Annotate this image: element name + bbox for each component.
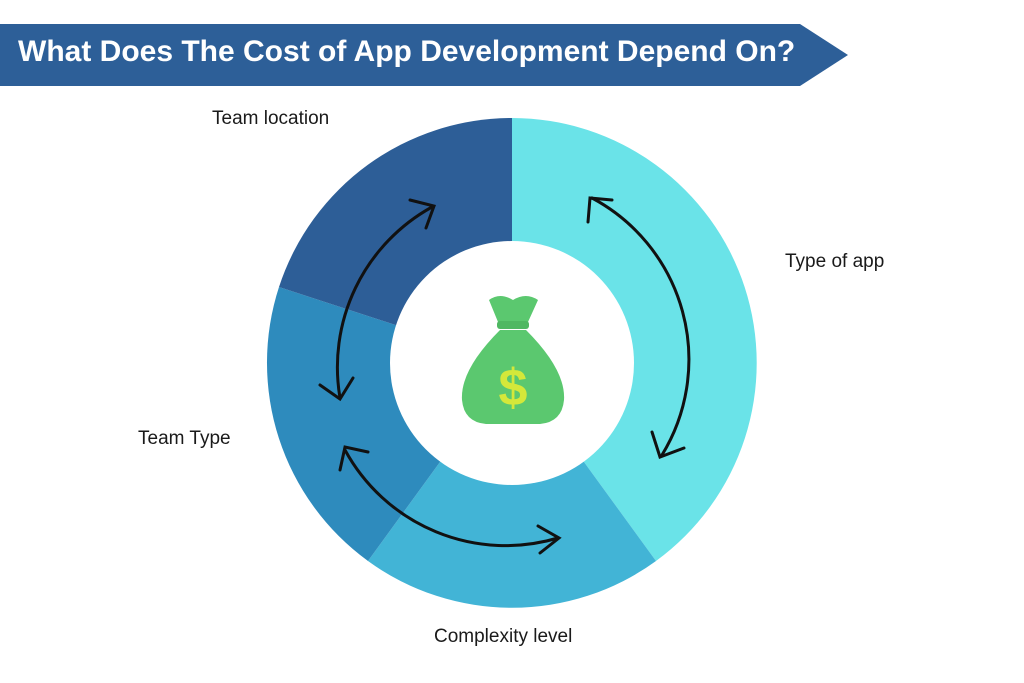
donut chart [266, 118, 757, 608]
segment: team type [266, 287, 440, 561]
label: complexity level: Complexity level [434, 626, 572, 647]
title banner: What Does The Cost of App Development Depend On? [18, 35, 795, 68]
icon: money bag [462, 296, 564, 424]
segment: complexity level [368, 462, 656, 608]
arrow: bottom [340, 447, 559, 553]
label: type of app: Type of app [785, 251, 884, 272]
icon: money bag: $ [499, 359, 528, 417]
segment: type of app [512, 118, 757, 561]
label: team type: Team Type [138, 428, 231, 449]
segment: team location [279, 118, 512, 325]
arrow: right [588, 198, 689, 457]
title banner [0, 24, 848, 86]
arrow: top-left [320, 200, 434, 399]
label: team location: Team location [212, 108, 329, 129]
